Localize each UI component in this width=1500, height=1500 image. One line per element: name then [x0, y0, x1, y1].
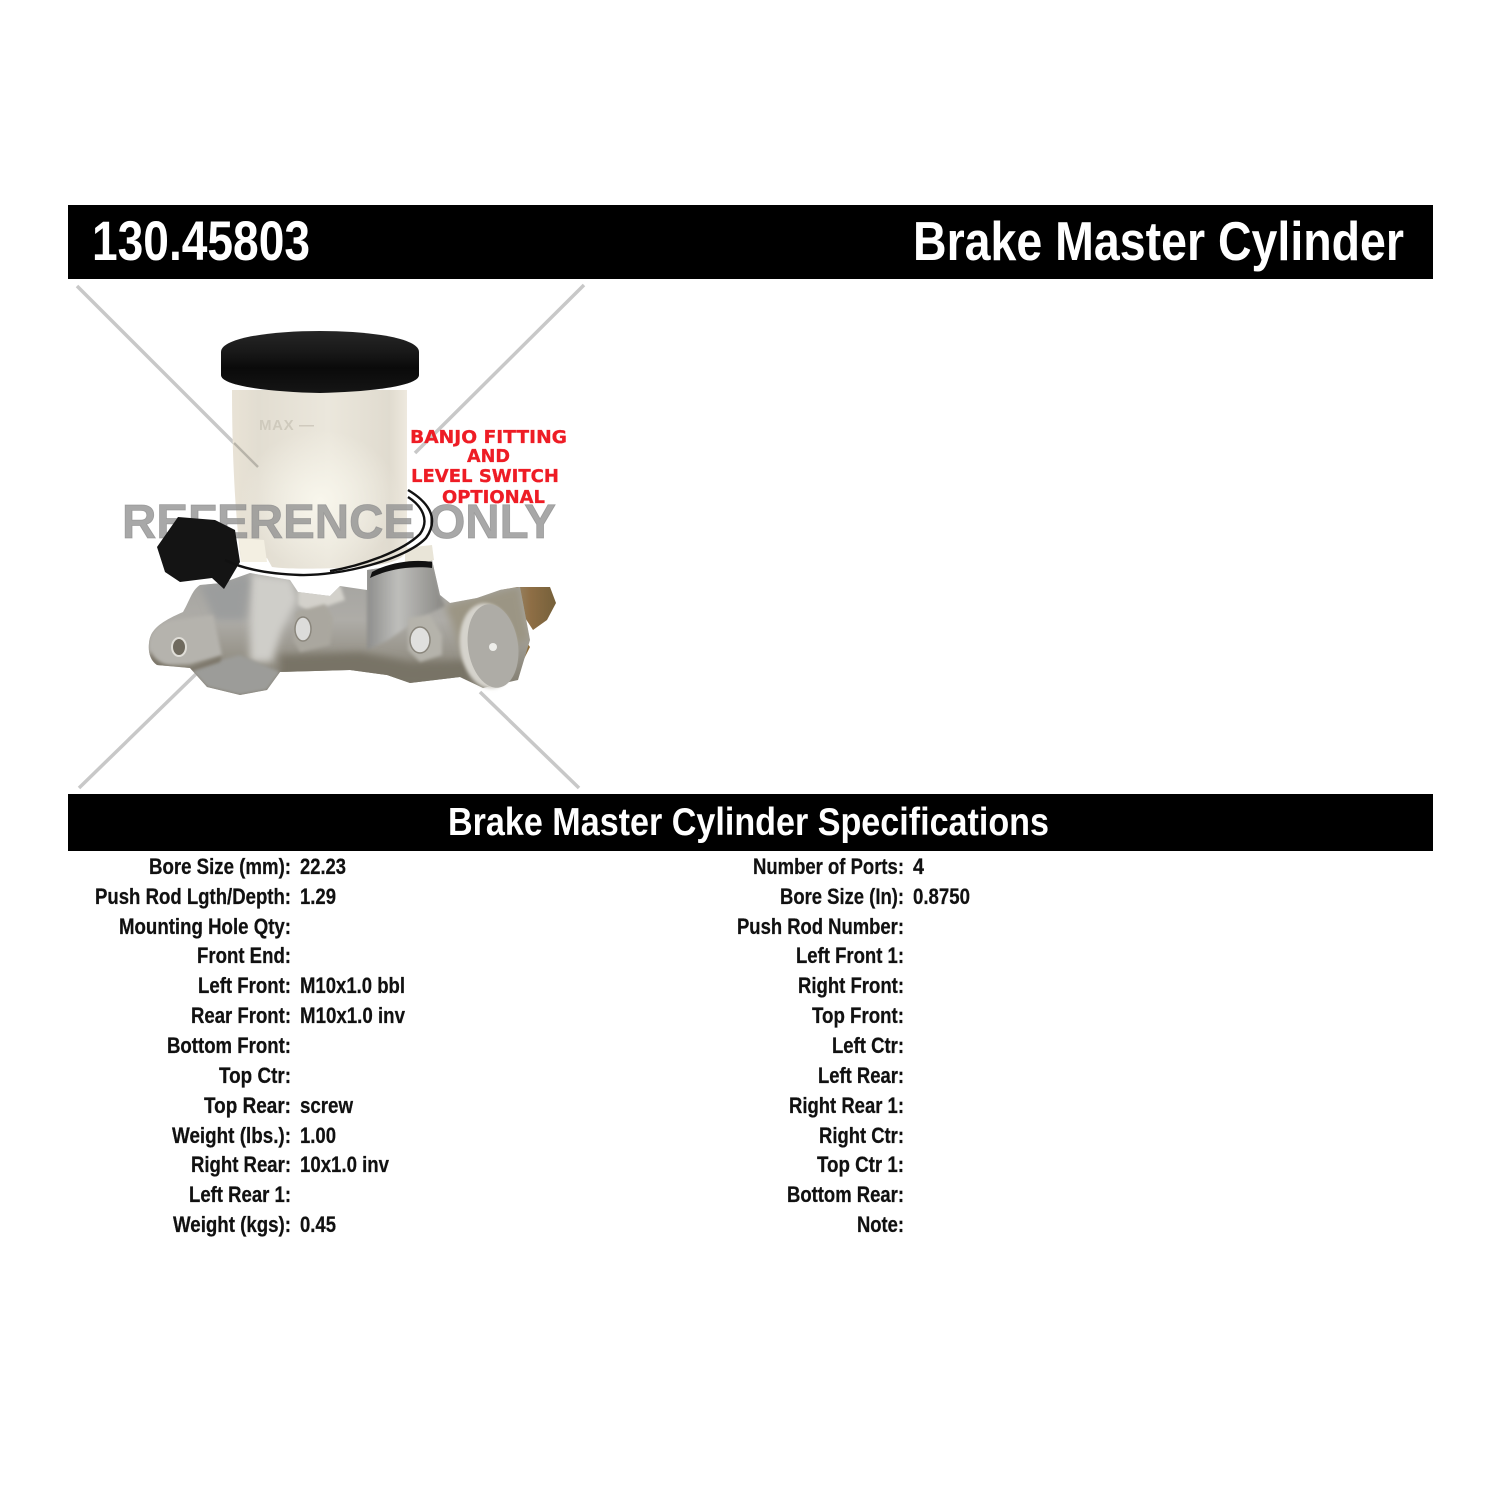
- callout: banjo fitting note: [410, 428, 567, 508]
- specifications right column: 0.8750: [913, 884, 970, 909]
- reservoir: [232, 390, 434, 578]
- watermark cross lines: [77, 285, 584, 788]
- specifications right column: Left Rear:: [818, 1063, 904, 1088]
- watermark line seen through reservoir: [234, 443, 258, 467]
- specifications left column: Bore Size (mm):: [149, 854, 291, 879]
- specifications left column: 1.00: [300, 1123, 336, 1148]
- specifications left column: Mounting Hole Qty:: [119, 914, 291, 939]
- mounting ear: [149, 615, 222, 665]
- specifications left column: Weight (lbs.):: [172, 1123, 291, 1148]
- black o-ring: [370, 561, 432, 578]
- callout: banjo fitting note: OPTIONAL: [442, 488, 545, 508]
- rear brass fitting: [500, 587, 556, 630]
- specifications left column: Right Rear:: [191, 1152, 291, 1177]
- specifications right column: Bore Size (In):: [780, 884, 904, 909]
- port 1: [293, 604, 333, 652]
- left tower highlight: [250, 573, 298, 662]
- electrical connector: [157, 517, 240, 589]
- specifications left column: M10x1.0 inv: [300, 1003, 406, 1028]
- specifications left column: Bottom Front:: [167, 1033, 291, 1058]
- specifications right column: Bottom Rear:: [787, 1182, 904, 1207]
- specifications right column: Top Ctr 1:: [817, 1152, 904, 1177]
- specifications right column: [737, 854, 970, 1237]
- specifications left column: Left Front:: [198, 973, 291, 998]
- specifications right column: Left Ctr:: [832, 1033, 904, 1058]
- specifications left column: Left Rear 1:: [189, 1182, 291, 1207]
- specifications right column: Push Rod Number:: [737, 914, 904, 939]
- reference only watermark: REFERENCE ONLY: [122, 496, 556, 549]
- specifications left column: 0.45: [300, 1212, 336, 1237]
- callout: banjo fitting note: BANJO FITTING: [410, 428, 567, 448]
- filler neck: [405, 545, 434, 568]
- specifications right column: 4: [913, 854, 925, 879]
- end cap disc: [454, 600, 522, 692]
- specifications left column: Top Ctr:: [219, 1063, 291, 1088]
- mounting tower: [367, 558, 445, 650]
- product title: Brake Master Cylinder: [913, 210, 1404, 272]
- specifications right column: Left Front 1:: [796, 943, 904, 968]
- level switch wires: [225, 490, 432, 575]
- shoulder shading: [200, 575, 250, 620]
- max mark: MAX —: [259, 417, 314, 434]
- specifications right column: Top Front:: [812, 1003, 904, 1028]
- specifications right column: Right Ctr:: [819, 1123, 904, 1148]
- lower brass fitting: [510, 637, 530, 673]
- specifications right column: Right Rear 1:: [789, 1093, 904, 1118]
- specifications left column: screw: [300, 1093, 354, 1118]
- ear hole: [172, 638, 186, 656]
- rear housing tone: [444, 587, 530, 643]
- ear bottom edge: [150, 650, 222, 672]
- cylinder body: [148, 560, 530, 695]
- specifications right column: Right Front:: [798, 973, 904, 998]
- specifications heading: Brake Master Cylinder Specifications: [448, 801, 1049, 844]
- specifications left column: 22.23: [300, 854, 346, 879]
- specifications right column: Number of Ports:: [753, 854, 904, 879]
- specifications right column: Note:: [857, 1212, 904, 1237]
- product illustration: brake master cylinder with watermark: [77, 285, 584, 788]
- specifications left column: Weight (kgs):: [173, 1212, 291, 1237]
- centre fitting: [297, 586, 346, 610]
- callout: banjo fitting note: LEVEL SWITCH: [411, 467, 559, 487]
- specifications left column: 1.29: [300, 884, 336, 909]
- specifications left column: Rear Front:: [191, 1003, 291, 1028]
- specifications left column: Top Rear:: [204, 1093, 291, 1118]
- callout: banjo fitting note: AND: [467, 447, 510, 467]
- specifications left column: Front End:: [197, 943, 291, 968]
- specifications left column: 10x1.0 inv: [300, 1152, 390, 1177]
- reservoir base tab: [239, 538, 267, 562]
- reservoir cap: [221, 331, 419, 393]
- port 2: [408, 615, 442, 662]
- part number: 130.45803: [92, 209, 310, 272]
- specifications left column: Push Rod Lgth/Depth:: [95, 884, 291, 909]
- specifications left column: M10x1.0 bbl: [300, 973, 405, 998]
- lower shadow band: [280, 652, 470, 690]
- lower lobe: [190, 655, 280, 695]
- header bar: [68, 205, 1433, 279]
- specifications left column: [95, 854, 406, 1237]
- specifications header bar: [68, 794, 1433, 851]
